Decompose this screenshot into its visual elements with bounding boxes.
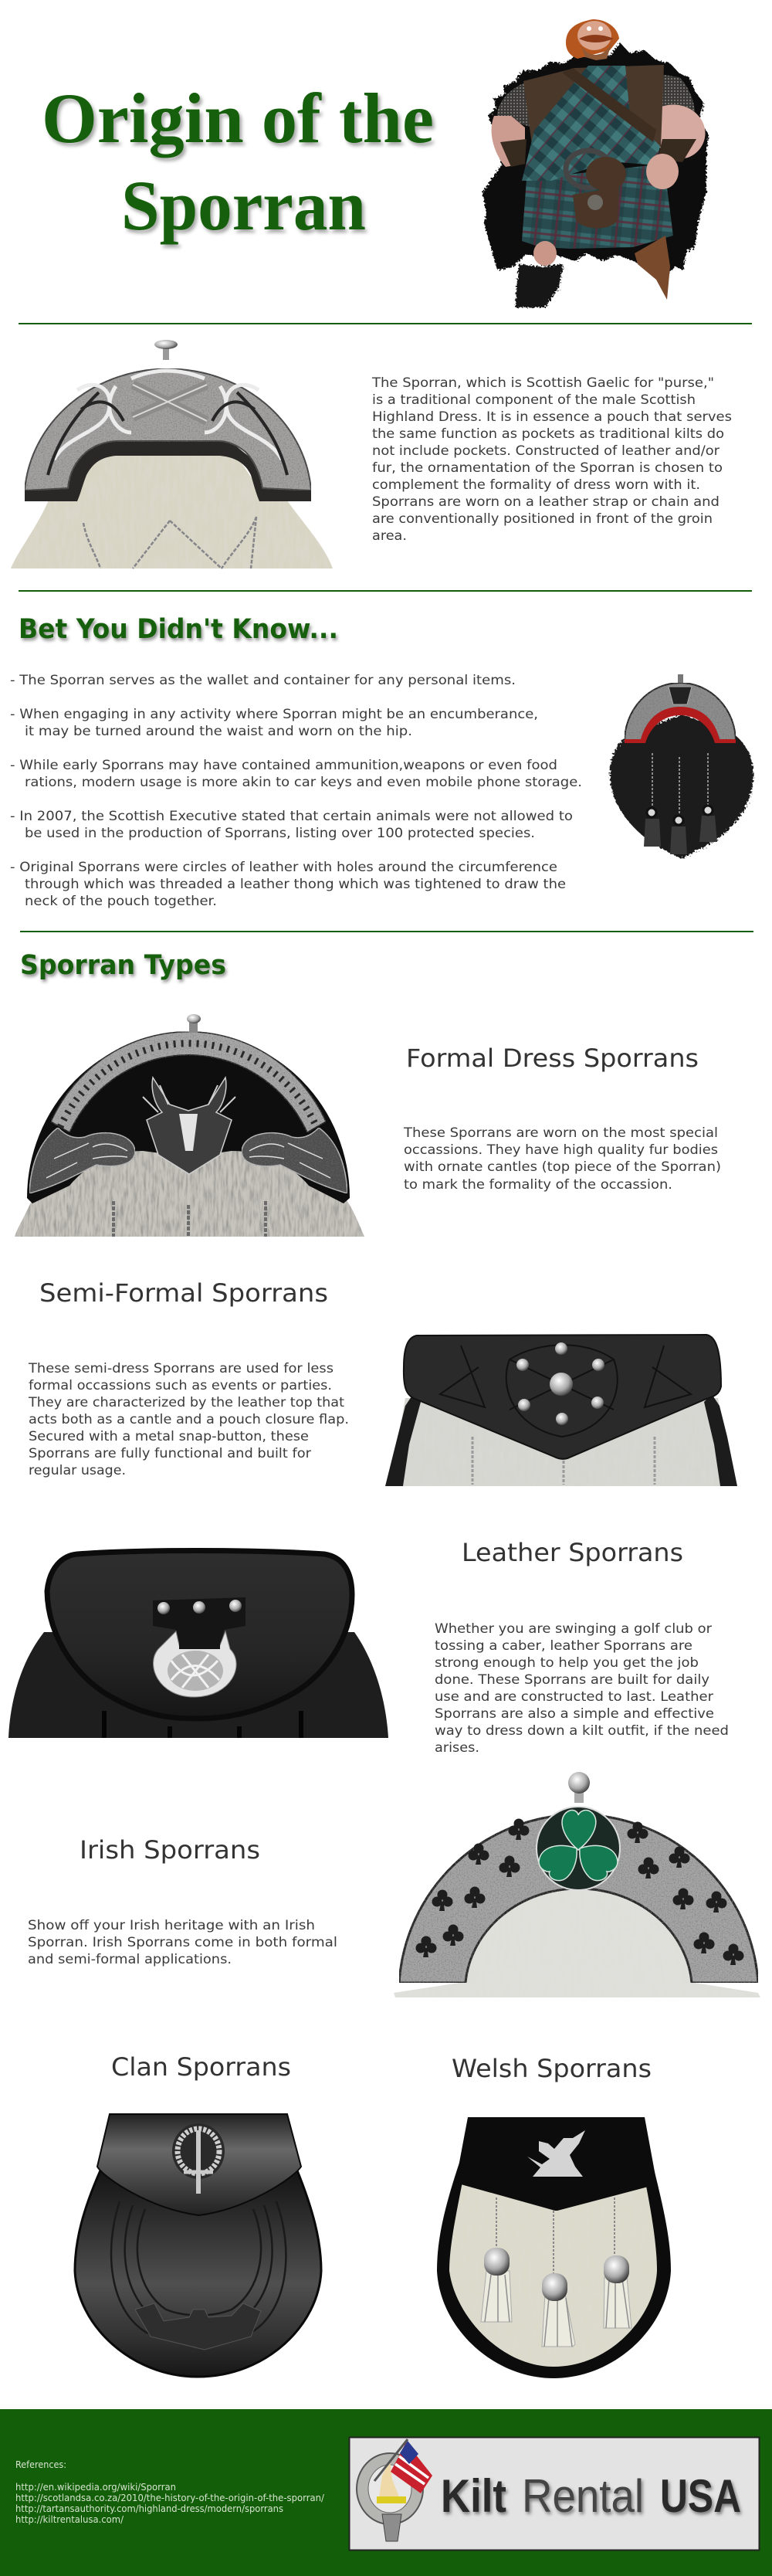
intro text block: [371, 375, 732, 544]
image: welsh sporran: [437, 2117, 671, 2378]
shamrock leaves: [539, 1811, 618, 1881]
white fur: [394, 1869, 760, 1997]
intro text block: are conventionally positioned in front of the groin: [372, 511, 713, 527]
logo wordmark: [441, 2470, 741, 2522]
text: formal dress description: with ornate cantles (top piece of the Sporran): [404, 1159, 721, 1175]
references: http://en.wikipedia.org/wiki/Sporran: [15, 2482, 176, 2493]
character boots: [515, 264, 564, 307]
leather flap: [404, 1335, 721, 1459]
black trim: [25, 436, 311, 501]
grey fur: [15, 1135, 364, 1237]
logo wordmark: Rental: [522, 2470, 644, 2522]
character shoulder strap: [562, 68, 656, 142]
character tartan sash: [522, 66, 660, 181]
image: irish sporran with shamrock: [394, 1772, 760, 1997]
leather flap: [97, 2114, 301, 2215]
character vest: [523, 65, 664, 151]
text: formal dress description: occassions. They have high quality fur bodies: [404, 1142, 718, 1158]
thistle right: [242, 1128, 347, 1193]
text: leather description: Sporrans are also a simple and effective: [435, 1706, 714, 1722]
heading: irish sporrans: Irish Sporrans: [80, 1835, 260, 1865]
strap loop: [153, 1597, 245, 1649]
references: http://scotlandsa.co.za/2010/the-history-of-the-origin-of-the-sporran/: [15, 2493, 325, 2503]
facts list: - Original Sporrans were circles of leather with holes around the circumference: [10, 860, 557, 875]
embossed horseshoe: [111, 2201, 286, 2341]
fur: [390, 1398, 733, 1486]
intro text block: The Sporran, which is Scottish Gaelic for "purse,": [371, 375, 714, 391]
text: semi-formal description: [28, 1361, 349, 1478]
heading: clan sporrans: Clan Sporrans: [111, 2052, 291, 2082]
black flap: [455, 2117, 657, 2211]
facts list: rations, modern usage is more akin to car keys and even mobile phone storage.: [25, 775, 582, 790]
logo wordmark: Kilt: [441, 2470, 506, 2522]
image: semi-formal sporran with leather flap: [385, 1335, 737, 1486]
chains: [496, 2198, 615, 2275]
text: leather description: arises.: [435, 1740, 479, 1756]
chains: [472, 1437, 655, 1485]
image: black fur sporran with red trim: [610, 674, 753, 859]
heading: welsh sporrans: Welsh Sporrans: [452, 2054, 652, 2083]
character chainmail arms: [497, 73, 695, 128]
black leather rim: [437, 2163, 671, 2378]
celtic buckle: [154, 1631, 236, 1697]
small shamrocks: [415, 1818, 744, 1965]
intro text block: area.: [372, 528, 407, 544]
stag head and leaves: [143, 1078, 235, 1174]
facts list: - In 2007, the Scottish Executive stated that certain animals were not allowed to: [10, 809, 573, 824]
image: clan sporran: [75, 2114, 321, 2377]
references: References:: [15, 2459, 66, 2470]
flap embossing: [440, 1345, 691, 1437]
leather pouch: [75, 2170, 321, 2377]
knob: [678, 674, 683, 683]
intro text block: complement the formality of dress worn with it.: [372, 477, 700, 493]
text: leather description: strong enough to help you get the job: [435, 1655, 699, 1671]
welsh dragon badge: [527, 2130, 585, 2177]
leather body: [8, 1632, 388, 1738]
heading: formal dress sporrans: Formal Dress Sporrans: [406, 1044, 699, 1073]
fur body: [11, 448, 333, 568]
image: formal dress sporran: [15, 1014, 364, 1237]
text: semi-formal description: These semi-dress Sporrans are used for less: [28, 1361, 334, 1376]
facts list: be used in the production of Sporrans, listing over 100 protected species.: [25, 826, 535, 841]
references: http://kiltrentalusa.com/: [15, 2514, 124, 2525]
clan crest: [172, 2123, 225, 2194]
facts list: neck of the pouch together.: [25, 894, 217, 909]
text: semi-formal description: acts both as a cantle and a pouch closure flap.: [29, 1412, 349, 1427]
references: [15, 2459, 325, 2525]
heading: bet you didn't know: Bet You Didn't Know...: [19, 614, 338, 645]
image: leather sporran with celtic buckle: [8, 1551, 388, 1738]
character fist: [646, 154, 679, 189]
intro text block: is a traditional component of the male Scottish: [372, 392, 696, 408]
black fur body: [610, 714, 753, 859]
centre jewel: [669, 687, 692, 704]
lion and saltire embossing: [133, 385, 207, 421]
image: silver cantle sporran with lions: [11, 340, 333, 568]
text: semi-formal description: They are characterized by the leather top that: [28, 1395, 344, 1410]
facts list: through which was threaded a leather thong which was tightened to draw the: [25, 877, 566, 892]
intro text block: Highland Dress. It is in essence a pouch that serves: [372, 409, 732, 425]
leather flap: [47, 1551, 352, 1719]
character head: [566, 19, 619, 60]
hanging chains: [113, 1201, 266, 1237]
illustration: kilted Highland king character: [482, 19, 709, 307]
embossed buckle: [135, 2303, 261, 2350]
logo wordmark: USA: [660, 2470, 741, 2522]
text: formal dress description: to mark the formality of the occassion.: [404, 1177, 672, 1193]
red lined cantle: [625, 683, 736, 742]
body lacing: [104, 1711, 301, 1738]
title: Origin of the: [42, 79, 434, 158]
chrome tassel caps: [484, 2248, 629, 2301]
facts list: - When engaging in any activity where Sporran might be an encumberance,: [10, 707, 538, 722]
text: irish description: Sporran. Irish Sporrans come in both formal: [28, 1935, 337, 1950]
character cape: [482, 42, 709, 277]
intro text block: not include pockets. Constructed of leather and/or: [372, 443, 720, 459]
white fur body: [449, 2178, 657, 2367]
text: leather description: tossing a caber, leather Sporrans are: [435, 1638, 692, 1654]
black cantle body: [27, 1033, 350, 1203]
text: formal dress description: These Sporrans are worn on the most special: [403, 1125, 718, 1141]
intro text block: the same function as pockets as traditional kilts do: [372, 426, 724, 442]
heading: semi-formal sporrans: Semi-Formal Sporrans: [39, 1278, 328, 1308]
text: formal dress description: [403, 1125, 721, 1193]
text: leather description: [435, 1621, 729, 1756]
text: irish description: and semi-formal applications.: [28, 1952, 232, 1967]
heading: sporran types: Sporran Types: [20, 950, 226, 981]
text: irish description: Show off your Irish heritage with an Irish: [28, 1918, 315, 1933]
text: leather description: done. These Sporrans are built for daily: [435, 1672, 709, 1688]
text: leather description: way to dress down a kilt outfit, if the need: [435, 1723, 729, 1739]
knob: [154, 340, 178, 360]
text: semi-formal description: regular usage.: [29, 1463, 126, 1478]
strap studs: [157, 1600, 242, 1614]
references: http://tartansauthority.com/highland-dress/modern/sporrans: [15, 2503, 283, 2514]
silver cantle band: [25, 368, 311, 490]
text: leather description: use and are constructed to last. Leather: [435, 1689, 713, 1705]
knob: [568, 1772, 590, 1803]
text: irish description: [28, 1918, 337, 1967]
text: semi-formal description: formal occassions such as events or parties.: [29, 1378, 332, 1393]
facts list: [10, 673, 582, 909]
text: semi-formal description: Secured with a metal snap-button, these: [29, 1429, 309, 1444]
fur tassels: [481, 2271, 631, 2347]
footer band: [0, 2409, 772, 2576]
knob: [187, 1014, 201, 1033]
shamrock boss: [537, 1807, 620, 1890]
intro text block: Sporrans are worn on a leather strap or chain and: [372, 494, 720, 510]
character forearms: [492, 116, 525, 167]
character leg and braid: [533, 236, 670, 300]
facts list: it may be turned around the waist and worn on the hip.: [25, 724, 412, 739]
logo panel: [349, 2438, 760, 2551]
intro text block: fur, the ornamentation of the Sporran is chosen to: [372, 460, 723, 476]
shamrock cantle arch: [399, 1814, 758, 1983]
character wrist bands: [500, 139, 696, 167]
text: semi-formal description: Sporrans are fully functional and built for: [29, 1446, 311, 1461]
thistle left: [29, 1128, 135, 1193]
chains: [83, 517, 256, 568]
character kilt: [522, 164, 673, 249]
facts list: - While early Sporrans may have contained ammunition,weapons or even food: [10, 758, 557, 773]
heading: leather sporrans: Leather Sporrans: [462, 1538, 683, 1567]
tassels and chains: [652, 753, 708, 819]
title: Sporran: [121, 166, 366, 245]
facts list: - The Sporran serves as the wallet and container for any personal items.: [10, 673, 516, 688]
text: leather description: Whether you are swinging a golf club or: [435, 1621, 712, 1637]
title: [42, 79, 434, 245]
metal studs: [516, 1342, 604, 1425]
leather side edges: [385, 1394, 737, 1486]
character sporran: [566, 151, 626, 229]
celtic knot band: [51, 1032, 326, 1132]
clan crest badge: [357, 2439, 432, 2541]
